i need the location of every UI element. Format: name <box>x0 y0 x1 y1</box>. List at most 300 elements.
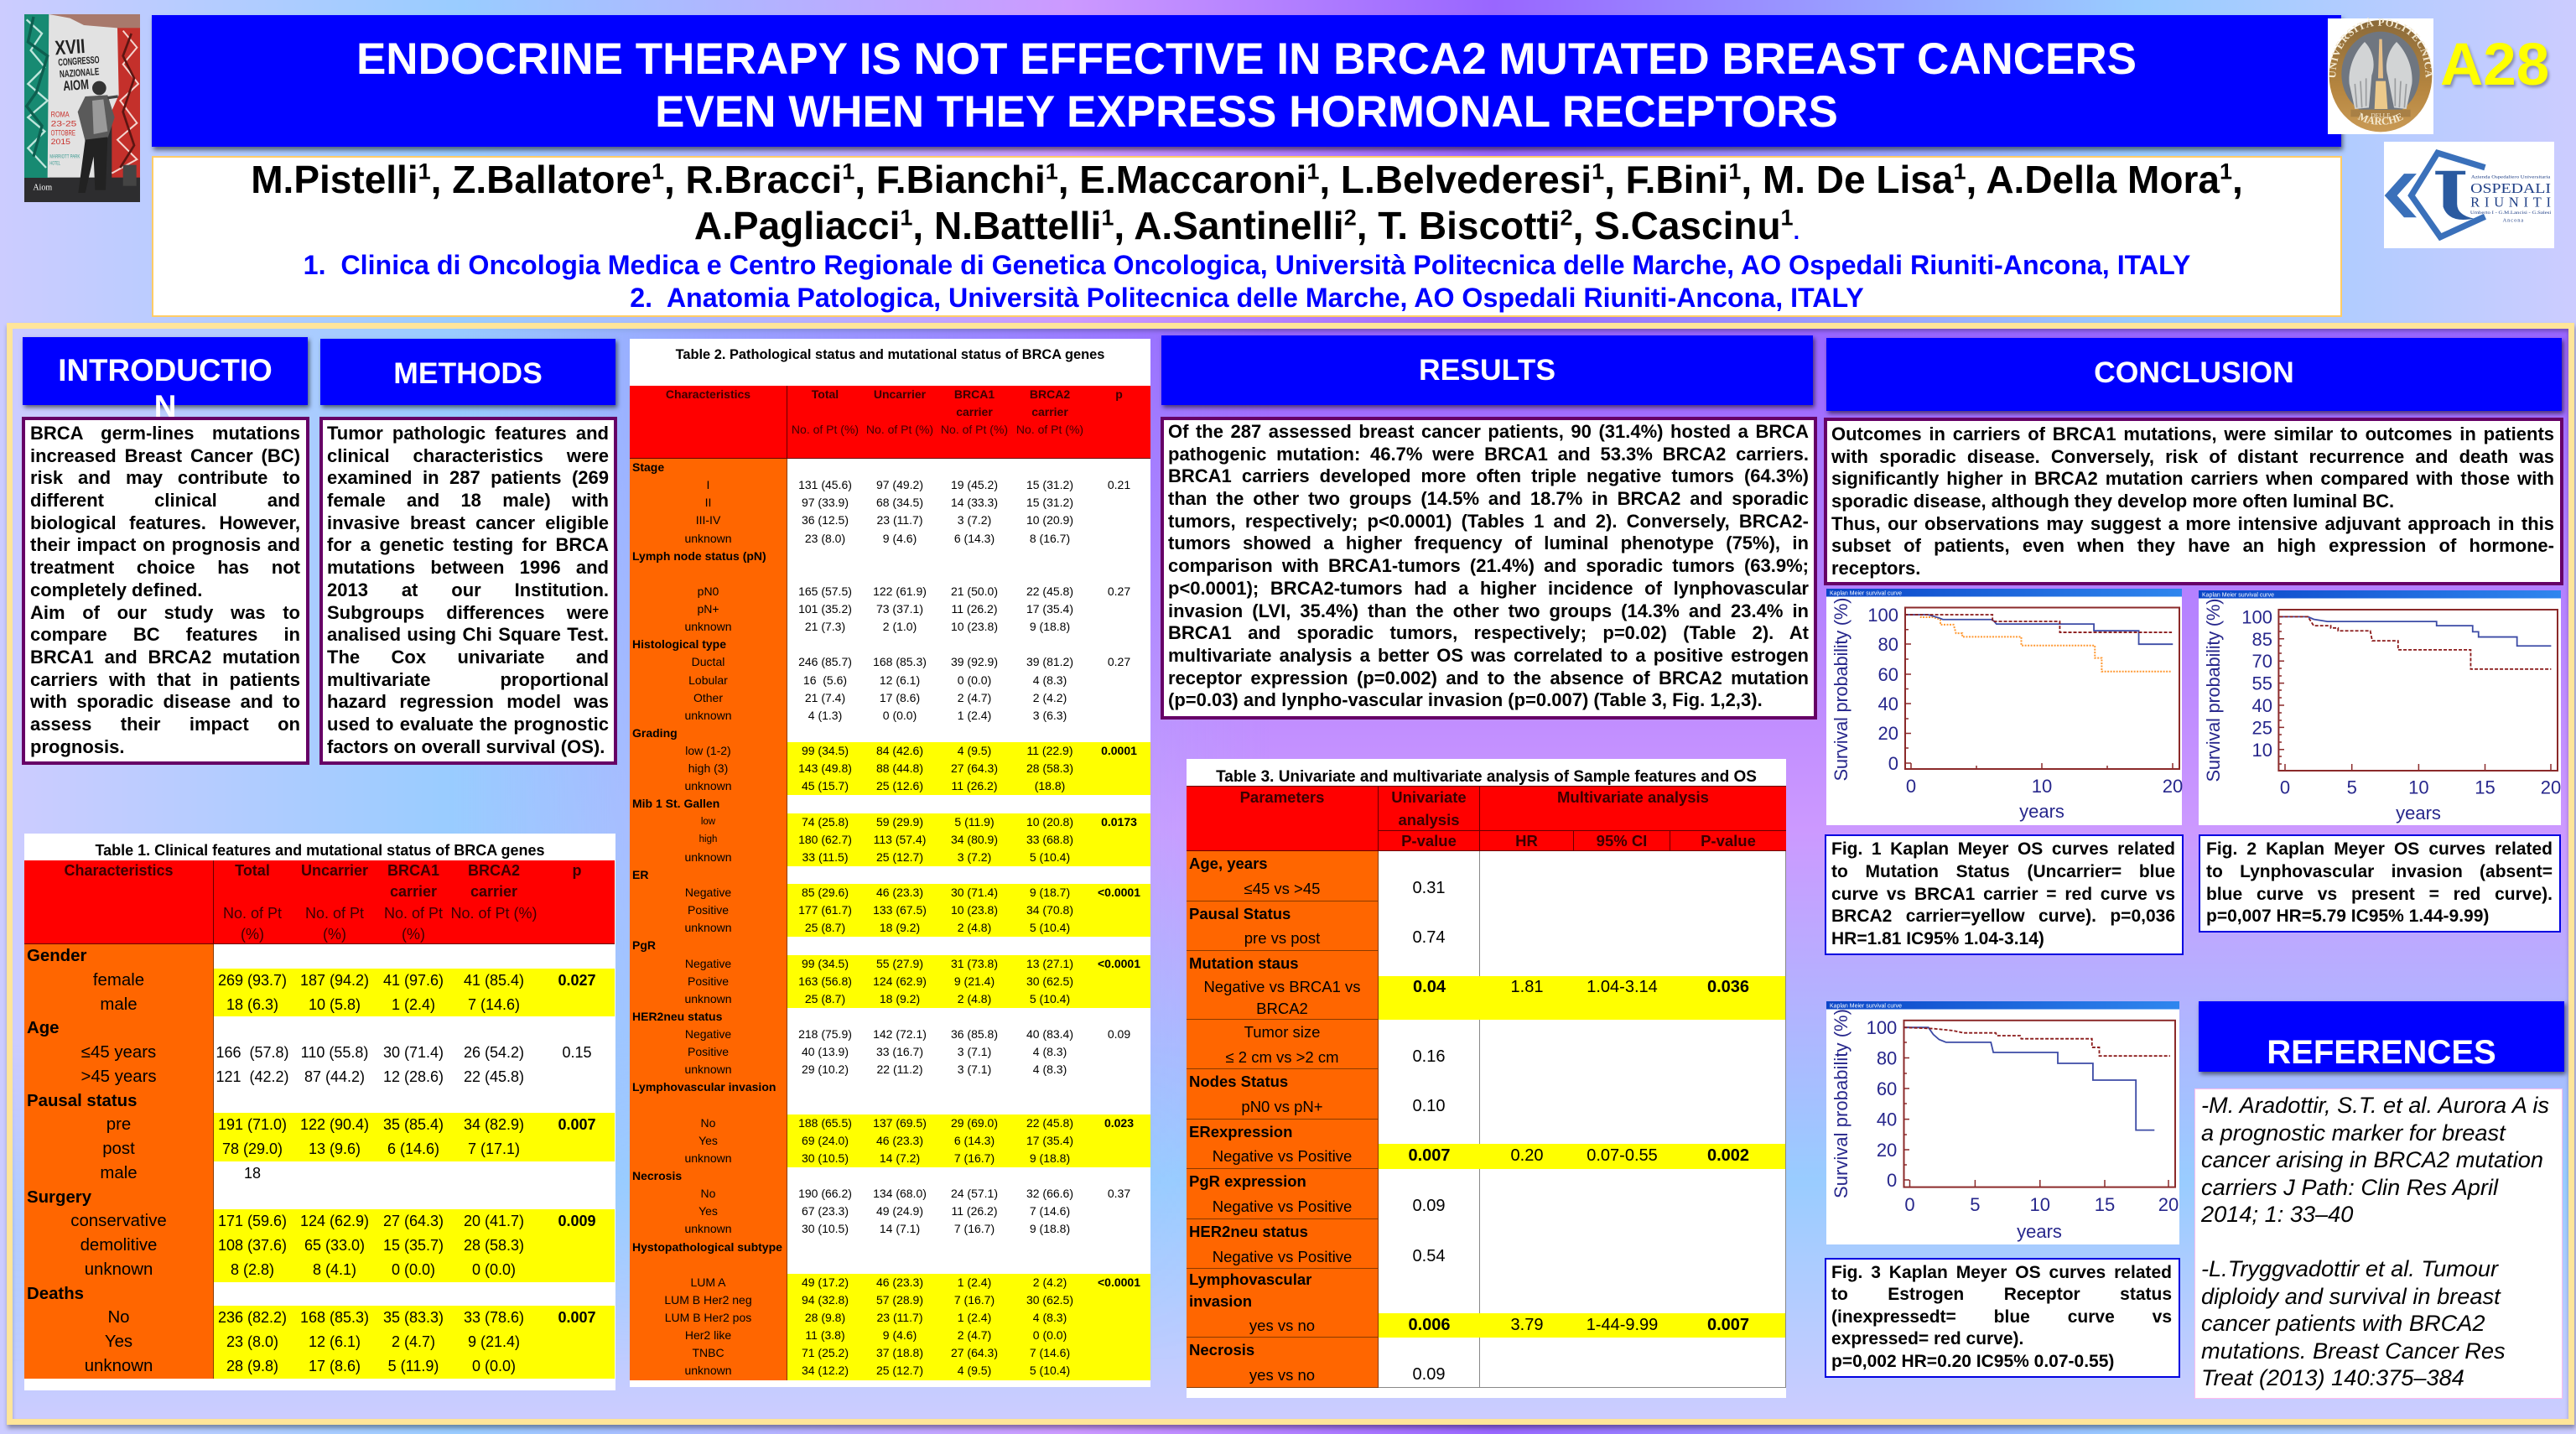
table 3 rows: 0.04 <box>1413 978 1446 996</box>
chart: figure 2 Kaplan Meier by lymphovascular invasion: 5 <box>2347 777 2357 798</box>
table 2 grid: unknown <box>684 532 732 545</box>
table 2 grid: 14 (7.2) <box>880 1151 920 1165</box>
table 2 grid: high <box>699 834 717 844</box>
table 2 grid: Yes <box>699 1134 718 1147</box>
table 2 grid: high (3) <box>688 761 728 775</box>
icon: Università Politecnica delle Marche seal: UNIVERSITÀ POLITECNICA <box>2328 18 2433 78</box>
table 2 grid: 9 (4.6) <box>883 532 917 545</box>
table 1 grid: 41 (85.4) <box>464 972 524 989</box>
table 2 grid: pN+ <box>697 602 719 616</box>
reference text: -M. Aradottir, S.T. et al. Aurora A is <box>2201 1092 2549 1118</box>
caption: figure 2: to Lynphovascular invasion (absent= <box>2206 862 2553 881</box>
table 2 grid: 73 (37.1) <box>876 602 923 616</box>
table 2 grid: 36 (12.5) <box>802 513 849 527</box>
table 2 grid: 165 (57.5) <box>798 585 852 598</box>
chart: figure 2 Kaplan Meier by lymphovascular invasion: 15 <box>2475 777 2496 798</box>
table 2 grid: 2 (4.7) <box>958 1328 991 1342</box>
table 2 grid: Total <box>812 387 839 401</box>
table 2 grid: 190 (66.2) <box>798 1187 852 1200</box>
authors and affiliations panel <box>152 156 2342 317</box>
table 2 grid: unknown <box>684 1063 732 1076</box>
table 2 grid: 11 (22.9) <box>1026 744 1073 757</box>
table 2 grid: 10 (23.8) <box>951 903 998 917</box>
chart: figure 1 Kaplan Meier by mutation status: 100 <box>1867 605 1898 626</box>
icon: congress poster: 23-25 <box>51 120 76 128</box>
chart: figure 1 Kaplan Meier by mutation status: Survival probability (%) <box>1831 597 1852 782</box>
table 2 grid: Stage <box>632 460 664 474</box>
table 2 grid: 25 (8.7) <box>805 992 845 1005</box>
icon: congress poster: 2015 <box>51 138 70 146</box>
authors <box>251 158 2243 247</box>
table 2 grid: 18 (9.2) <box>880 992 920 1005</box>
table 2 grid: 101 (35.2) <box>798 602 852 616</box>
table 2 grid: 37 (18.8) <box>876 1346 923 1359</box>
table 2 grid: 28 (58.3) <box>1026 761 1073 775</box>
table 2 grid: Negative <box>685 956 731 969</box>
reference text: -L.Tryggvadottir et al. Tumour <box>2201 1255 2498 1281</box>
chart: figure 2 Kaplan Meier by lymphovascular invasion: 100 <box>2241 606 2272 627</box>
table 3 rows: 0.09 <box>1413 1365 1445 1384</box>
chart: figure 2 Kaplan Meier by lymphovascular invasion: 55 <box>2252 673 2272 694</box>
table 2 grid: 27 (64.3) <box>951 1346 998 1359</box>
chart: figure 2 Kaplan Meier by lymphovascular invasion: 40 <box>2252 695 2272 716</box>
table 3 header: HR <box>1515 832 1538 849</box>
table 2 grid: 4 (1.3) <box>808 709 842 722</box>
panel: results text: receptor expression (p=0.002) and to the absence of BRCA2 mutation <box>1168 668 1809 688</box>
table 3 header: Univariate <box>1391 788 1467 806</box>
table 2 grid: 71 (25.2) <box>802 1346 849 1359</box>
table 1 grid: 78 (29.0) <box>222 1140 283 1157</box>
panel: results text: tumors showed a higher frequency of luminal phenotype (75%), in <box>1168 533 1809 553</box>
table 3 rows: Lymphovascular <box>1189 1270 1311 1288</box>
table 2 grid: BRCA1 <box>954 387 995 401</box>
table 3 rows: 0.74 <box>1413 928 1445 947</box>
authors: A.Pagliacci1, N.Battelli1, A.Santinelli2, T. Biscotti2, S.Cascinu1. <box>694 204 1800 247</box>
table 3 rows: 0.002 <box>1707 1146 1749 1165</box>
table 2 grid: 124 (62.9) <box>873 974 927 988</box>
table 2 grid: 33 (11.5) <box>802 850 849 864</box>
table 2 grid: 17 (35.4) <box>1026 602 1073 616</box>
reference text: diploidy and survival in breast <box>2201 1283 2501 1309</box>
table 2 grid: Her2 like <box>685 1328 731 1342</box>
table 2 grid: 4 (9.5) <box>958 744 991 757</box>
chart: figure 3 Kaplan Meier by estrogen receptor status: 0 <box>1904 1194 1915 1215</box>
icon: Ospedali Riuniti logo: Azienda Ospedaliero Universitaria <box>2471 174 2551 179</box>
table 2 grid: unknown <box>684 921 732 934</box>
panel: introduction text: different clinical and <box>30 490 300 511</box>
table 2 grid: 133 (67.5) <box>873 903 927 917</box>
table 2 grid: 3 (7.2) <box>958 850 991 864</box>
table 2 grid: unknown <box>684 620 732 633</box>
table 2 grid: 3 (7.2) <box>958 513 991 527</box>
table 2 grid: 10 (20.8) <box>1026 815 1073 829</box>
table 2 grid: 163 (56.8) <box>798 974 852 988</box>
table 1 grid: 12 (28.6) <box>383 1068 444 1085</box>
table 1 grid: Deaths <box>27 1285 84 1303</box>
table 2 grid: 23 (11.7) <box>877 513 922 527</box>
panel: methods text <box>319 417 617 765</box>
table 2 grid: 39 (92.9) <box>951 655 998 668</box>
table 2 grid: 59 (29.9) <box>876 815 923 829</box>
panel: results text: (p=0.03) and lynpho-vascular invasion (p=0.007) (Table 3, Fig. 1,2,3). <box>1168 689 1763 710</box>
table 2 grid: low (1-2) <box>685 744 731 757</box>
table 2 grid: 30 (10.5) <box>802 1222 849 1235</box>
panel: methods text: Subgroups differences were <box>327 602 609 622</box>
table 1 grid: No <box>107 1308 130 1327</box>
table 2 grid: 9 (18.8) <box>1030 1222 1070 1235</box>
panel: methods text: analised using Chi Square Test. <box>327 624 609 645</box>
table 2 grid: Other <box>693 691 723 704</box>
table 2 grid: 122 (61.9) <box>873 585 927 598</box>
table 2 grid: 29 (69.0) <box>951 1116 998 1130</box>
panel: results text: Of the 287 assessed breast cancer patients, 90 (31.4%) hosted a BRCA <box>1168 421 1809 442</box>
table 2 grid: unknown <box>684 1222 732 1235</box>
table 1 grid: 191 (71.0) <box>218 1116 287 1133</box>
table 2 grid: 0.09 <box>1108 1027 1130 1041</box>
table 2 grid: low <box>701 817 715 827</box>
chart: figure 1 Kaplan Meier by mutation status: 60 <box>1878 664 1898 685</box>
table 3 rows: yes vs no <box>1249 1366 1315 1384</box>
table 2 grid: 5 (10.4) <box>1030 992 1070 1005</box>
chart: figure 2 Kaplan Meier by lymphovascular invasion: 20 <box>2541 777 2561 798</box>
table 2 grid: 7 (16.7) <box>954 1293 995 1307</box>
heading: methods <box>320 339 615 405</box>
table 3 rows: 1.04-3.14 <box>1587 978 1658 996</box>
table 2 grid: LUM A <box>690 1276 726 1289</box>
table 2 grid: 94 (32.8) <box>802 1293 849 1307</box>
table 1 grid: Pausal status <box>27 1092 137 1110</box>
table 2 grid: 4 (9.5) <box>958 1364 991 1377</box>
reference text: carriers J Path: Clin Res April <box>2201 1174 2498 1200</box>
chart: figure 1 Kaplan Meier by mutation status: 20 <box>2163 776 2183 797</box>
table 2 grid: 7 (16.7) <box>954 1151 995 1165</box>
table 1 grid: 41 (97.6) <box>383 972 444 989</box>
icon: Ospedali Riuniti logo <box>2384 142 2554 248</box>
table 2 grid: carrier <box>956 405 993 418</box>
table 1 grid: 12 (6.1) <box>309 1333 361 1350</box>
table 1 grid: 187 (94.2) <box>300 972 369 989</box>
table 1 grid: conservative <box>70 1212 167 1230</box>
table 1 grid: 10 (5.8) <box>309 996 361 1013</box>
table 3 rows: 0.16 <box>1413 1047 1445 1066</box>
table 1 grid: 35 (83.3) <box>383 1309 444 1326</box>
table 2 grid: Negative <box>685 1027 731 1041</box>
table 2 grid: unknown <box>684 779 732 792</box>
table 2 grid: 0.0001 <box>1101 744 1137 757</box>
table 2 grid: carrier <box>1031 405 1068 418</box>
table 2 grid: unknown <box>684 1151 732 1165</box>
chart: figure 3 Kaplan Meier by estrogen receptor status: 20 <box>1877 1140 1897 1161</box>
chart: figure 3 Kaplan Meier by estrogen receptor status: 40 <box>1877 1109 1897 1130</box>
table 3 rows: 1-44-9.99 <box>1587 1316 1658 1334</box>
chart: figure 3 Kaplan Meier by estrogen receptor status: 15 <box>2095 1194 2115 1215</box>
reference text: 2014; 1: 33–40 <box>2201 1201 2353 1227</box>
table 2 grid: 9 (18.8) <box>1030 620 1070 633</box>
panel: introduction text: BRCA1 and BRCA2 mutation <box>30 647 300 668</box>
table 2 grid: 1 (2.4) <box>958 1276 991 1289</box>
icon: Ospedali Riuniti logo: OSPEDALI <box>2470 180 2551 196</box>
table 2 grid: 3 (7.1) <box>958 1045 991 1058</box>
panel: introduction text: risk and may contribute to <box>30 467 300 488</box>
table 3 rows: 0.20 <box>1511 1146 1543 1165</box>
table 1 grid: Characteristics <box>64 862 174 879</box>
heading: methods: METHODS <box>393 356 543 390</box>
table 1 grid: 18 (6.3) <box>226 996 278 1013</box>
table 2 grid: 0.37 <box>1108 1187 1130 1200</box>
panel: table 2 <box>630 339 1150 1387</box>
table 2 grid: Positive <box>688 1045 729 1058</box>
table 1 grid: 8 (2.8) <box>231 1261 274 1278</box>
table 1 grid: female <box>93 971 144 990</box>
panel: methods text: invasive breast cancer eligible <box>327 512 609 533</box>
chart: figure 3 Kaplan Meier by estrogen receptor status: 60 <box>1877 1078 1897 1099</box>
table 1 grid: (%) <box>402 926 425 943</box>
chart: figure 3 Kaplan Meier by estrogen receptor status: Survival probability (%) <box>1831 1009 1852 1198</box>
table 2 grid: 33 (68.8) <box>1026 833 1073 846</box>
table 2 grid: No <box>701 1187 715 1200</box>
table 1 grid: 13 (9.6) <box>309 1140 361 1157</box>
panel: results text: p<0.0001); BRCA2-tumors had a higher incidence of lynphovascular <box>1168 578 1809 599</box>
panel: results text <box>1161 417 1817 720</box>
caption: figure 3: (inexpressedt= blue curve vs <box>1831 1307 2172 1327</box>
table 1 grid: Uncarrier <box>301 862 368 879</box>
table 2 grid: 30 (62.5) <box>1026 974 1073 988</box>
table 3 rows: PgR expression <box>1189 1172 1306 1190</box>
caption: figure 1: curve vs BRCA1 carrier = red curve vs <box>1831 885 2175 904</box>
panel: introduction text: increased Breast Cancer (BC) <box>30 445 300 466</box>
table 2 grid: 142 (72.1) <box>873 1027 927 1041</box>
table 2 grid: 11 (3.8) <box>805 1328 845 1342</box>
table 1 grid: demolitive <box>80 1236 157 1255</box>
panel: results text: tumors, respectively; p<0.0001) (Tables 1 and 2). Conversely, BRCA2- <box>1168 511 1809 532</box>
table 2 grid: 11 (26.2) <box>951 1204 998 1218</box>
table 2 grid: 188 (65.5) <box>798 1116 852 1130</box>
table 2 grid: 33 (16.7) <box>876 1045 923 1058</box>
table 2 grid: 3 (6.3) <box>1033 709 1067 722</box>
table 2 grid: pN0 <box>698 585 719 598</box>
table 2 grid: 2 (4.7) <box>958 691 991 704</box>
table 2 grid: Negative <box>685 886 731 899</box>
table 1 grid: 171 (59.6) <box>218 1213 287 1229</box>
chart: figure 2 Kaplan Meier by lymphovascular invasion: years <box>2396 803 2441 824</box>
panel: methods text: multivariate proportional <box>327 669 609 690</box>
chart: figure 1 Kaplan Meier by mutation status: 80 <box>1878 634 1898 655</box>
table 2 grid: 15 (31.2) <box>1026 478 1073 491</box>
table 3 rows: pN0 vs pN+ <box>1241 1098 1323 1115</box>
table 2 grid: 113 (57.4) <box>874 833 926 846</box>
table 2 grid: 4 (8.3) <box>1033 1045 1067 1058</box>
table 3 rows: Negative vs Positive <box>1213 1147 1352 1165</box>
caption: figure 3: to Estrogen Receptor status <box>1831 1285 2172 1304</box>
table 1 grid: carrier <box>390 883 437 900</box>
table 3 rows: Negative vs BRCA1 vs <box>1203 978 1361 995</box>
table 2 grid: 21 (7.4) <box>805 691 845 704</box>
caption: figure 1 <box>1825 834 2184 955</box>
table 2 grid: <0.0001 <box>1098 956 1140 969</box>
table 2 grid: 2 (4.2) <box>1033 691 1067 704</box>
caption: figure 2: Fig. 2 Kaplan Meyer OS curves related <box>2206 839 2553 859</box>
table 1 grid: post <box>102 1140 135 1158</box>
table 2 grid: Lymph node status (pN) <box>632 549 766 563</box>
table 2 grid: 11 (26.2) <box>951 602 998 616</box>
table 1 grid: 236 (82.2) <box>218 1309 287 1326</box>
caption: figure 2: blue curve vs present = red curve). <box>2206 885 2553 904</box>
table 2 grid: Positive <box>688 974 729 988</box>
table 1 grid: 22 (45.8) <box>464 1068 524 1085</box>
table 2 grid: 67 (23.3) <box>802 1204 849 1218</box>
table 1 grid: No. of Pt <box>223 905 282 922</box>
panel: introduction text: their impact on prognosis and <box>30 534 300 555</box>
icon: congress poster: CONGRESSO <box>58 54 100 68</box>
caption: figure 2: p=0,007 HR=5.79 IC95% 1.44-9.99) <box>2206 907 2489 926</box>
table 3 rows: HER2neu status <box>1189 1223 1308 1240</box>
table 3 rows: 0.09 <box>1413 1197 1445 1215</box>
panel: results text: pathogenic mutation: 46.7% were BRCA1 and 53.3% BRCA2 carriers. <box>1168 444 1809 465</box>
table 2 grid: 9 (21.4) <box>954 974 995 988</box>
table 2 grid: Mib 1 St. Gallen <box>632 797 719 810</box>
table 1 grid: 87 (44.2) <box>304 1068 365 1085</box>
panel: conclusion text: significantly higher in BRCA2 mutation carriers when compared with those with <box>1831 468 2554 489</box>
table 1 grid: 108 (37.6) <box>218 1237 287 1254</box>
table 2 grid: 13 (27.1) <box>1026 956 1073 969</box>
table 2 grid: 168 (85.3) <box>873 655 927 668</box>
table 2 grid: 14 (33.3) <box>951 496 998 509</box>
caption: figure 1: to Mutation Status (Uncarrier= blue <box>1831 862 2175 881</box>
chart: figure 3 Kaplan Meier by estrogen receptor status: 5 <box>1970 1194 1981 1215</box>
poster code A28: A28 <box>2440 32 2549 98</box>
panel: methods text: examined in 287 patients (269 <box>327 467 609 488</box>
caption: figure 3: p=0,002 HR=0.20 IC95% 0.07-0.55) <box>1831 1352 2114 1371</box>
heading: references <box>2199 1001 2564 1072</box>
table 1 grid: Yes <box>105 1333 132 1351</box>
table 2 grid: 246 (85.7) <box>798 655 852 668</box>
chart: figure 2 Kaplan Meier by lymphovascular invasion: 0 <box>2280 777 2290 798</box>
table 1 grid: 65 (33.0) <box>304 1237 365 1254</box>
table 3 rows: 0.10 <box>1413 1097 1445 1115</box>
table 1 grid: male <box>100 995 138 1014</box>
table 3 rows: Necrosis <box>1189 1341 1254 1359</box>
panel: results text: than the other two groups (14.5% and 18.7% in BRCA2 and sporadic <box>1168 488 1809 509</box>
table 1 grid: 0.009 <box>558 1213 596 1229</box>
panel: methods text: for a genetic testing for BRCA <box>327 534 609 555</box>
table 2 grid: 57 (28.9) <box>876 1293 923 1307</box>
heading: introduction <box>23 337 308 405</box>
table 2 grid: 21 (50.0) <box>951 585 998 598</box>
table 1 grid: BRCA1 <box>387 862 439 879</box>
table 2 grid: p <box>1115 387 1123 401</box>
table 1 grid: Age <box>27 1019 60 1037</box>
table 1 grid: 0.15 <box>562 1044 592 1061</box>
table 1 grid: 28 (58.3) <box>464 1237 524 1254</box>
panel: results text: BRCA1 carriers developed more often triple negative tumors (64.3%) <box>1168 465 1809 486</box>
table 1 grid: 18 <box>244 1165 261 1182</box>
title text: EVEN WHEN THEY EXPRESS HORMONAL RECEPTORS <box>655 87 1838 137</box>
table 2 grid: 10 (23.8) <box>951 620 998 633</box>
table 2 grid: TNBC <box>692 1346 724 1359</box>
table 2 grid: 68 (34.5) <box>876 496 923 509</box>
table 1 grid: 0 (0.0) <box>472 1358 516 1374</box>
table 1 grid: 35 (85.4) <box>383 1116 444 1133</box>
panel: introduction text: carriers with that in patients <box>30 669 300 690</box>
table 2 grid: 5 (10.4) <box>1030 921 1070 934</box>
heading: introduction: INTRODUCTIO <box>58 353 273 387</box>
table 3 rows: ≤ 2 cm vs >2 cm <box>1225 1048 1339 1066</box>
table 2 grid: 0 (0.0) <box>883 709 917 722</box>
icon: congress poster: MARRIOTT PARK <box>49 155 80 160</box>
panel: conclusion text: sporadic disease, although they develop more often luminal BC. <box>1831 491 2394 512</box>
table 2 grid: 2 (4.2) <box>1033 1276 1067 1289</box>
panel: introduction text: BRCA germ-lines mutations <box>30 423 300 444</box>
table 1 grid: 30 (71.4) <box>383 1044 444 1061</box>
panel: introduction text: assess their impact on <box>30 714 300 735</box>
table 3 rows: 0.54 <box>1413 1247 1445 1265</box>
table 3 rows: 0.31 <box>1413 879 1445 897</box>
icon: Università Politecnica delle Marche seal: MARCHE <box>2358 112 2403 125</box>
caption: figure 1: HR=1.81 IC95% 1.04-3.14) <box>1831 929 2044 948</box>
table 2 grid: 17 (8.6) <box>880 691 920 704</box>
table 3 rows: 0.036 <box>1707 978 1749 996</box>
table 2 grid: 5 (10.4) <box>1030 1364 1070 1377</box>
panel: results text: invasion (LVI, 35.4%) than the other two groups (14.3% and 23.4% in <box>1168 600 1809 621</box>
table 2 grid: 1 (2.4) <box>958 709 991 722</box>
table 1 grid: 9 (21.4) <box>468 1333 520 1350</box>
table 2 grid: 131 (45.6) <box>798 478 852 491</box>
table 2 grid: 4 (8.3) <box>1033 673 1067 686</box>
table 2 grid: 34 (80.9) <box>951 833 998 846</box>
table 1 grid: No. of Pt <box>305 905 364 922</box>
chart: figure 1 Kaplan Meier by mutation status: 0 <box>1906 776 1916 797</box>
table 2 grid: HER2neu status <box>632 1010 722 1023</box>
panel: conclusion text: with sporadic disease. Conversely, risk of distant recurrence and death was <box>1831 446 2554 467</box>
table 3 rows: 0.007 <box>1408 1146 1451 1165</box>
table 1 grid: 15 (35.7) <box>383 1237 444 1254</box>
caption: figure 3: expressed= red curve). <box>1831 1329 2023 1348</box>
chart: figure 3 Kaplan Meier by estrogen receptor status <box>1826 1001 2179 1244</box>
table 1 grid: 166 (57.8) <box>216 1044 289 1061</box>
table 2 grid: 134 (68.0) <box>873 1187 927 1200</box>
table 2 grid: 49 (17.2) <box>802 1276 849 1289</box>
chart: figure 3 Kaplan Meier by estrogen receptor status: years <box>2017 1221 2062 1242</box>
table 2 grid: <0.0001 <box>1098 886 1140 899</box>
table 2 grid: 25 (12.7) <box>876 1364 923 1377</box>
icon: Università Politecnica delle Marche seal <box>2328 18 2433 134</box>
table 2 grid: Histological type <box>632 637 726 651</box>
table 1 grid: (%) <box>323 926 346 943</box>
chart: figure 1 Kaplan Meier by mutation status: 10 <box>2032 776 2052 797</box>
table 3 rows: BRCA2 <box>1256 1000 1308 1017</box>
table 3 rows: Pausal Status <box>1189 905 1291 922</box>
panel: table 3 <box>1187 759 1786 1398</box>
chart: figure 2 Kaplan Meier by lymphovascular invasion: 10 <box>2408 777 2429 798</box>
table 2 grid: No. of Pt (%) <box>866 423 933 436</box>
table 1 grid <box>24 860 615 1379</box>
title banner <box>152 15 2341 147</box>
table 2 grid: 0.023 <box>1104 1116 1134 1130</box>
heading: results <box>1161 335 1813 405</box>
table 2 grid: 7 (14.6) <box>1030 1204 1070 1218</box>
chart: figure 2 Kaplan Meier by lymphovascular invasion: 25 <box>2252 717 2272 738</box>
table 1 grid: male <box>100 1164 138 1182</box>
panel: conclusion text: receptors. <box>1831 558 1920 579</box>
table 2 grid: 85 (29.6) <box>802 886 849 899</box>
table 2 grid: 46 (23.3) <box>876 1134 923 1147</box>
panel: introduction text: treatment choice has not <box>30 557 300 578</box>
table 2 grid: 88 (44.8) <box>876 761 923 775</box>
table 2 grid: 0.27 <box>1108 585 1130 598</box>
caption: figure 1: Fig. 1 Kaplan Meyer OS curves related <box>1831 839 2175 859</box>
panel: conclusion text: subset of patients, even when they have an high expression of hormone- <box>1831 535 2554 556</box>
table 2 grid: 31 (73.8) <box>951 956 998 969</box>
